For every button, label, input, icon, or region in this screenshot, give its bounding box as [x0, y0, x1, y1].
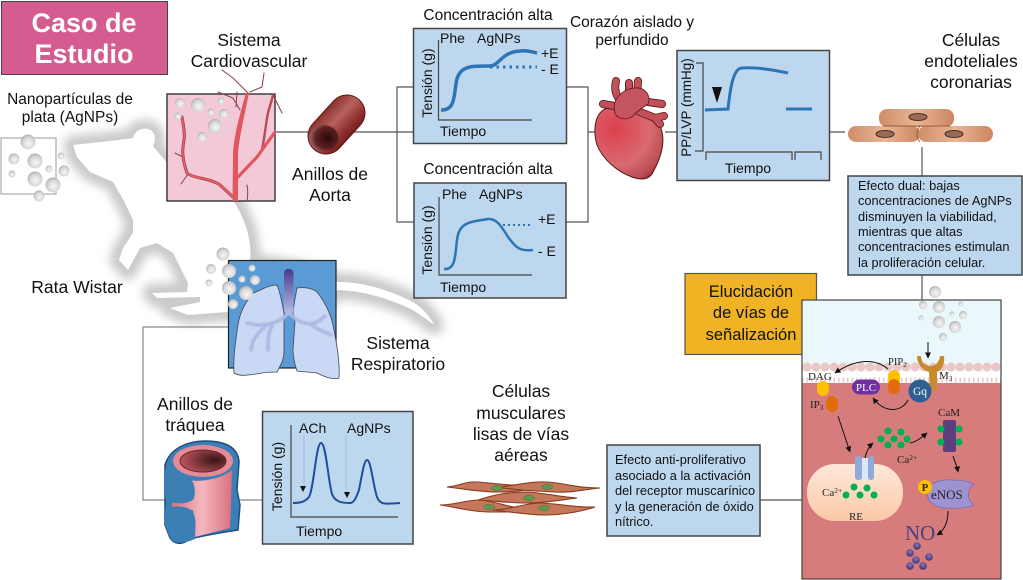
membrane — [802, 362, 1001, 383]
endoplasmic reticulum — [807, 456, 903, 523]
callout: anti-proliferative effect — [607, 445, 760, 536]
label: isolated heart: Corazón aislado y — [570, 14, 694, 31]
endoplasmic reticulum: Ca — [822, 487, 834, 499]
panel: high concentration chart 2: +E — [538, 211, 556, 227]
cytosolic calcium: 2+ — [909, 453, 917, 462]
IP3: 3 — [820, 404, 824, 412]
IP3: IP — [810, 399, 820, 411]
panel: high concentration chart 1: Concentración alta — [423, 7, 553, 24]
panel: high concentration chart 2: - E — [538, 243, 556, 259]
panel: high concentration chart 2: Tiempo — [440, 279, 486, 295]
label: airway smooth muscle cells: aéreas — [494, 445, 548, 465]
rat silhouette: Wistar rat — [73, 129, 434, 325]
panel: high concentration chart 2 — [414, 161, 566, 298]
cytosolic calcium: Ca — [897, 454, 909, 466]
NO — [905, 521, 935, 570]
icon: lungs panel — [206, 248, 339, 379]
label: isolated heart — [570, 14, 694, 49]
icon: endothelial cells — [848, 109, 993, 142]
icon: heart — [595, 81, 664, 179]
connector lines — [143, 87, 922, 500]
label: cardiovascular system: Sistema — [217, 30, 281, 50]
callout: dual effect: mientras que altas — [858, 224, 963, 239]
panel: high concentration chart 1: - E — [541, 61, 559, 77]
label: coronary endothelial cells: endoteliales — [924, 51, 1018, 71]
label: respiratory system — [351, 333, 445, 374]
heading: signalling pathways — [685, 274, 816, 354]
nanoparticles entering — [918, 286, 967, 341]
label: respiratory system: Respiratorio — [351, 354, 445, 374]
label: tracheal rings: tráquea — [165, 415, 225, 435]
callout: anti-proliferative effect: y la generación de óxido — [615, 499, 754, 514]
panel: tracheal chart: Tiempo — [296, 523, 342, 539]
arrow: ligand to receptor — [927, 342, 929, 358]
label: tracheal rings: Anillos de — [157, 394, 233, 414]
panel: tracheal chart: ACh — [299, 420, 326, 436]
callout: dual effect: concentraciones estimulan — [858, 239, 1010, 254]
PLC — [852, 380, 880, 394]
eNOS — [918, 480, 974, 508]
icon: smooth muscle cells — [440, 482, 600, 515]
PIP2: PIP — [888, 357, 903, 368]
label: isolated heart: perfundido — [595, 32, 669, 49]
panel: perfused heart chart — [677, 50, 830, 180]
panel: signalling pathway diagram — [802, 286, 1001, 579]
PLC: PLC — [856, 382, 876, 394]
eNOS: eNOS — [931, 487, 963, 502]
label: Rata Wistar: Rata Wistar — [31, 277, 123, 297]
callout: dual effect: la proliferación celular. — [858, 255, 985, 270]
panel: tracheal chart — [262, 412, 413, 544]
arrows: cascade — [835, 362, 958, 535]
panel: perfused heart chart: Tiempo — [725, 160, 771, 176]
panel: high concentration chart 1: Tiempo — [440, 123, 486, 139]
label: airway smooth muscle cells — [473, 381, 569, 465]
callout: anti-proliferative effect: Efecto anti-proliferativo — [615, 452, 746, 467]
PIP2 — [888, 357, 907, 394]
icon: tracheal ring — [165, 441, 240, 543]
callout: anti-proliferative effect: del receptor muscarínico — [615, 483, 755, 498]
panel: high concentration chart 2: Phe — [442, 186, 467, 202]
label: respiratory system: Sistema — [366, 333, 430, 353]
icon: nanoparticle box — [1, 134, 70, 202]
title: Caso de — [31, 8, 137, 38]
panel: tracheal chart: AgNPs — [347, 420, 391, 436]
label: coronary endothelial cells: coronarias — [930, 72, 1012, 92]
label: nanoparticles: Nanopartículas de — [7, 91, 133, 108]
panel: tracheal chart: Tensión (g) — [269, 442, 285, 511]
NO: NO — [905, 521, 935, 545]
callout: anti-proliferative effect: asociado a la activación — [615, 468, 751, 483]
calmodulin: CaM — [938, 407, 960, 419]
label: nanoparticles: plata (AgNPs) — [22, 109, 118, 126]
callout: dual effect: Efecto dual: bajas — [858, 178, 960, 193]
panel: high concentration chart 2: Tensión (g) — [419, 205, 435, 275]
label: cardiovascular system — [191, 30, 308, 71]
label: coronary endothelial cells: Células — [942, 30, 1000, 50]
PIP2: 2 — [903, 361, 907, 369]
panel: high concentration chart 1: +E — [541, 45, 559, 61]
panel: high concentration chart 2: Concentración alta — [423, 161, 553, 178]
panel: high concentration chart 1 — [414, 7, 566, 144]
endoplasmic reticulum: RE — [849, 511, 863, 523]
receptor M3 with Gq: M — [939, 370, 949, 382]
panel: perfused heart chart: PP/LVP (mmHg) — [679, 58, 694, 157]
cytosolic calcium — [878, 428, 917, 466]
label: cardiovascular system: Cardiovascular — [191, 51, 308, 71]
label: aortic rings: Aorta — [309, 185, 351, 205]
label: tracheal rings — [157, 394, 233, 435]
callout: dual effect: concentraciones de AgNPs — [858, 193, 1012, 208]
title — [2, 2, 168, 74]
callout: dual effect — [848, 176, 1022, 275]
eNOS: P — [922, 483, 929, 494]
panel: high concentration chart 1: Phe — [440, 30, 465, 46]
panel: high concentration chart 1: AgNPs — [477, 30, 521, 46]
icon: vessels panel — [167, 70, 282, 201]
IP3 — [810, 396, 838, 412]
panel: high concentration chart 2: AgNPs — [479, 186, 523, 202]
label: airway smooth muscle cells: musculares — [476, 403, 566, 423]
DAG — [808, 371, 832, 396]
label: aortic rings: Anillos de — [292, 164, 368, 184]
receptor M3 with Gq: Gq — [913, 386, 927, 398]
callout: dual effect: disminuyen la viabilidad, — [858, 209, 997, 224]
calmodulin — [938, 407, 962, 452]
label: airway smooth muscle cells: lisas de vías — [473, 424, 569, 444]
icon: aortic ring tube — [310, 113, 347, 151]
DAG: DAG — [808, 371, 832, 383]
heading: signalling pathways: Elucidación — [709, 283, 793, 301]
panel: high concentration chart 1: Tensión (g) — [419, 48, 435, 118]
heading: signalling pathways: señalización — [706, 326, 796, 344]
label: aortic rings — [292, 164, 368, 205]
receptor M3 with Gq: 3 — [949, 375, 953, 383]
label: coronary endothelial cells — [924, 30, 1018, 92]
endoplasmic reticulum: 2+ — [834, 486, 842, 495]
label: airway smooth muscle cells: Células — [492, 381, 550, 401]
title: Estudio — [34, 39, 134, 69]
label: nanoparticles — [7, 91, 133, 126]
receptor M3 with Gq — [908, 356, 953, 402]
heading: signalling pathways: de vías de — [713, 304, 789, 322]
callout: anti-proliferative effect: nítrico. — [615, 514, 653, 529]
